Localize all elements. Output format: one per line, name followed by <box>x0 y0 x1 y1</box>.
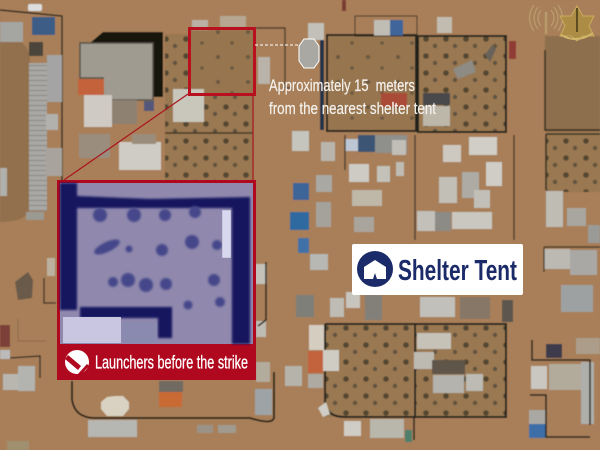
fenced plots below the panel <box>72 262 274 437</box>
orchard plots <box>165 30 600 417</box>
target highlight box <box>190 28 254 94</box>
legend text: Shelter Tent <box>398 255 517 287</box>
shelter tent legend <box>352 244 523 295</box>
tents rows <box>192 0 600 442</box>
icon: shelter tent <box>357 251 393 287</box>
dark blue shadow frame <box>60 183 250 344</box>
label text: Launchers before the strike <box>95 352 248 372</box>
icon: star emblem <box>560 6 594 41</box>
tree shadows <box>92 206 225 310</box>
annotation text <box>269 76 436 118</box>
distance measure: dashed line and shelter outline <box>255 39 319 68</box>
icon: launcher <box>65 350 89 377</box>
logos: unit and IDF emblem <box>530 5 594 41</box>
grey roof <box>122 322 157 343</box>
central building with shadow <box>78 32 204 170</box>
icon: signal antenna <box>530 5 562 34</box>
panel: blue-tinted launcher close-up <box>57 180 256 380</box>
connector lines <box>64 94 253 180</box>
annotation text: from the nearest shelter tent <box>269 99 436 118</box>
white streak <box>222 210 231 258</box>
left edge plots and tents <box>0 4 62 450</box>
label: launchers bar <box>65 350 248 377</box>
white roof <box>63 317 121 343</box>
annotation text: Approximately 15 meters <box>269 76 415 95</box>
